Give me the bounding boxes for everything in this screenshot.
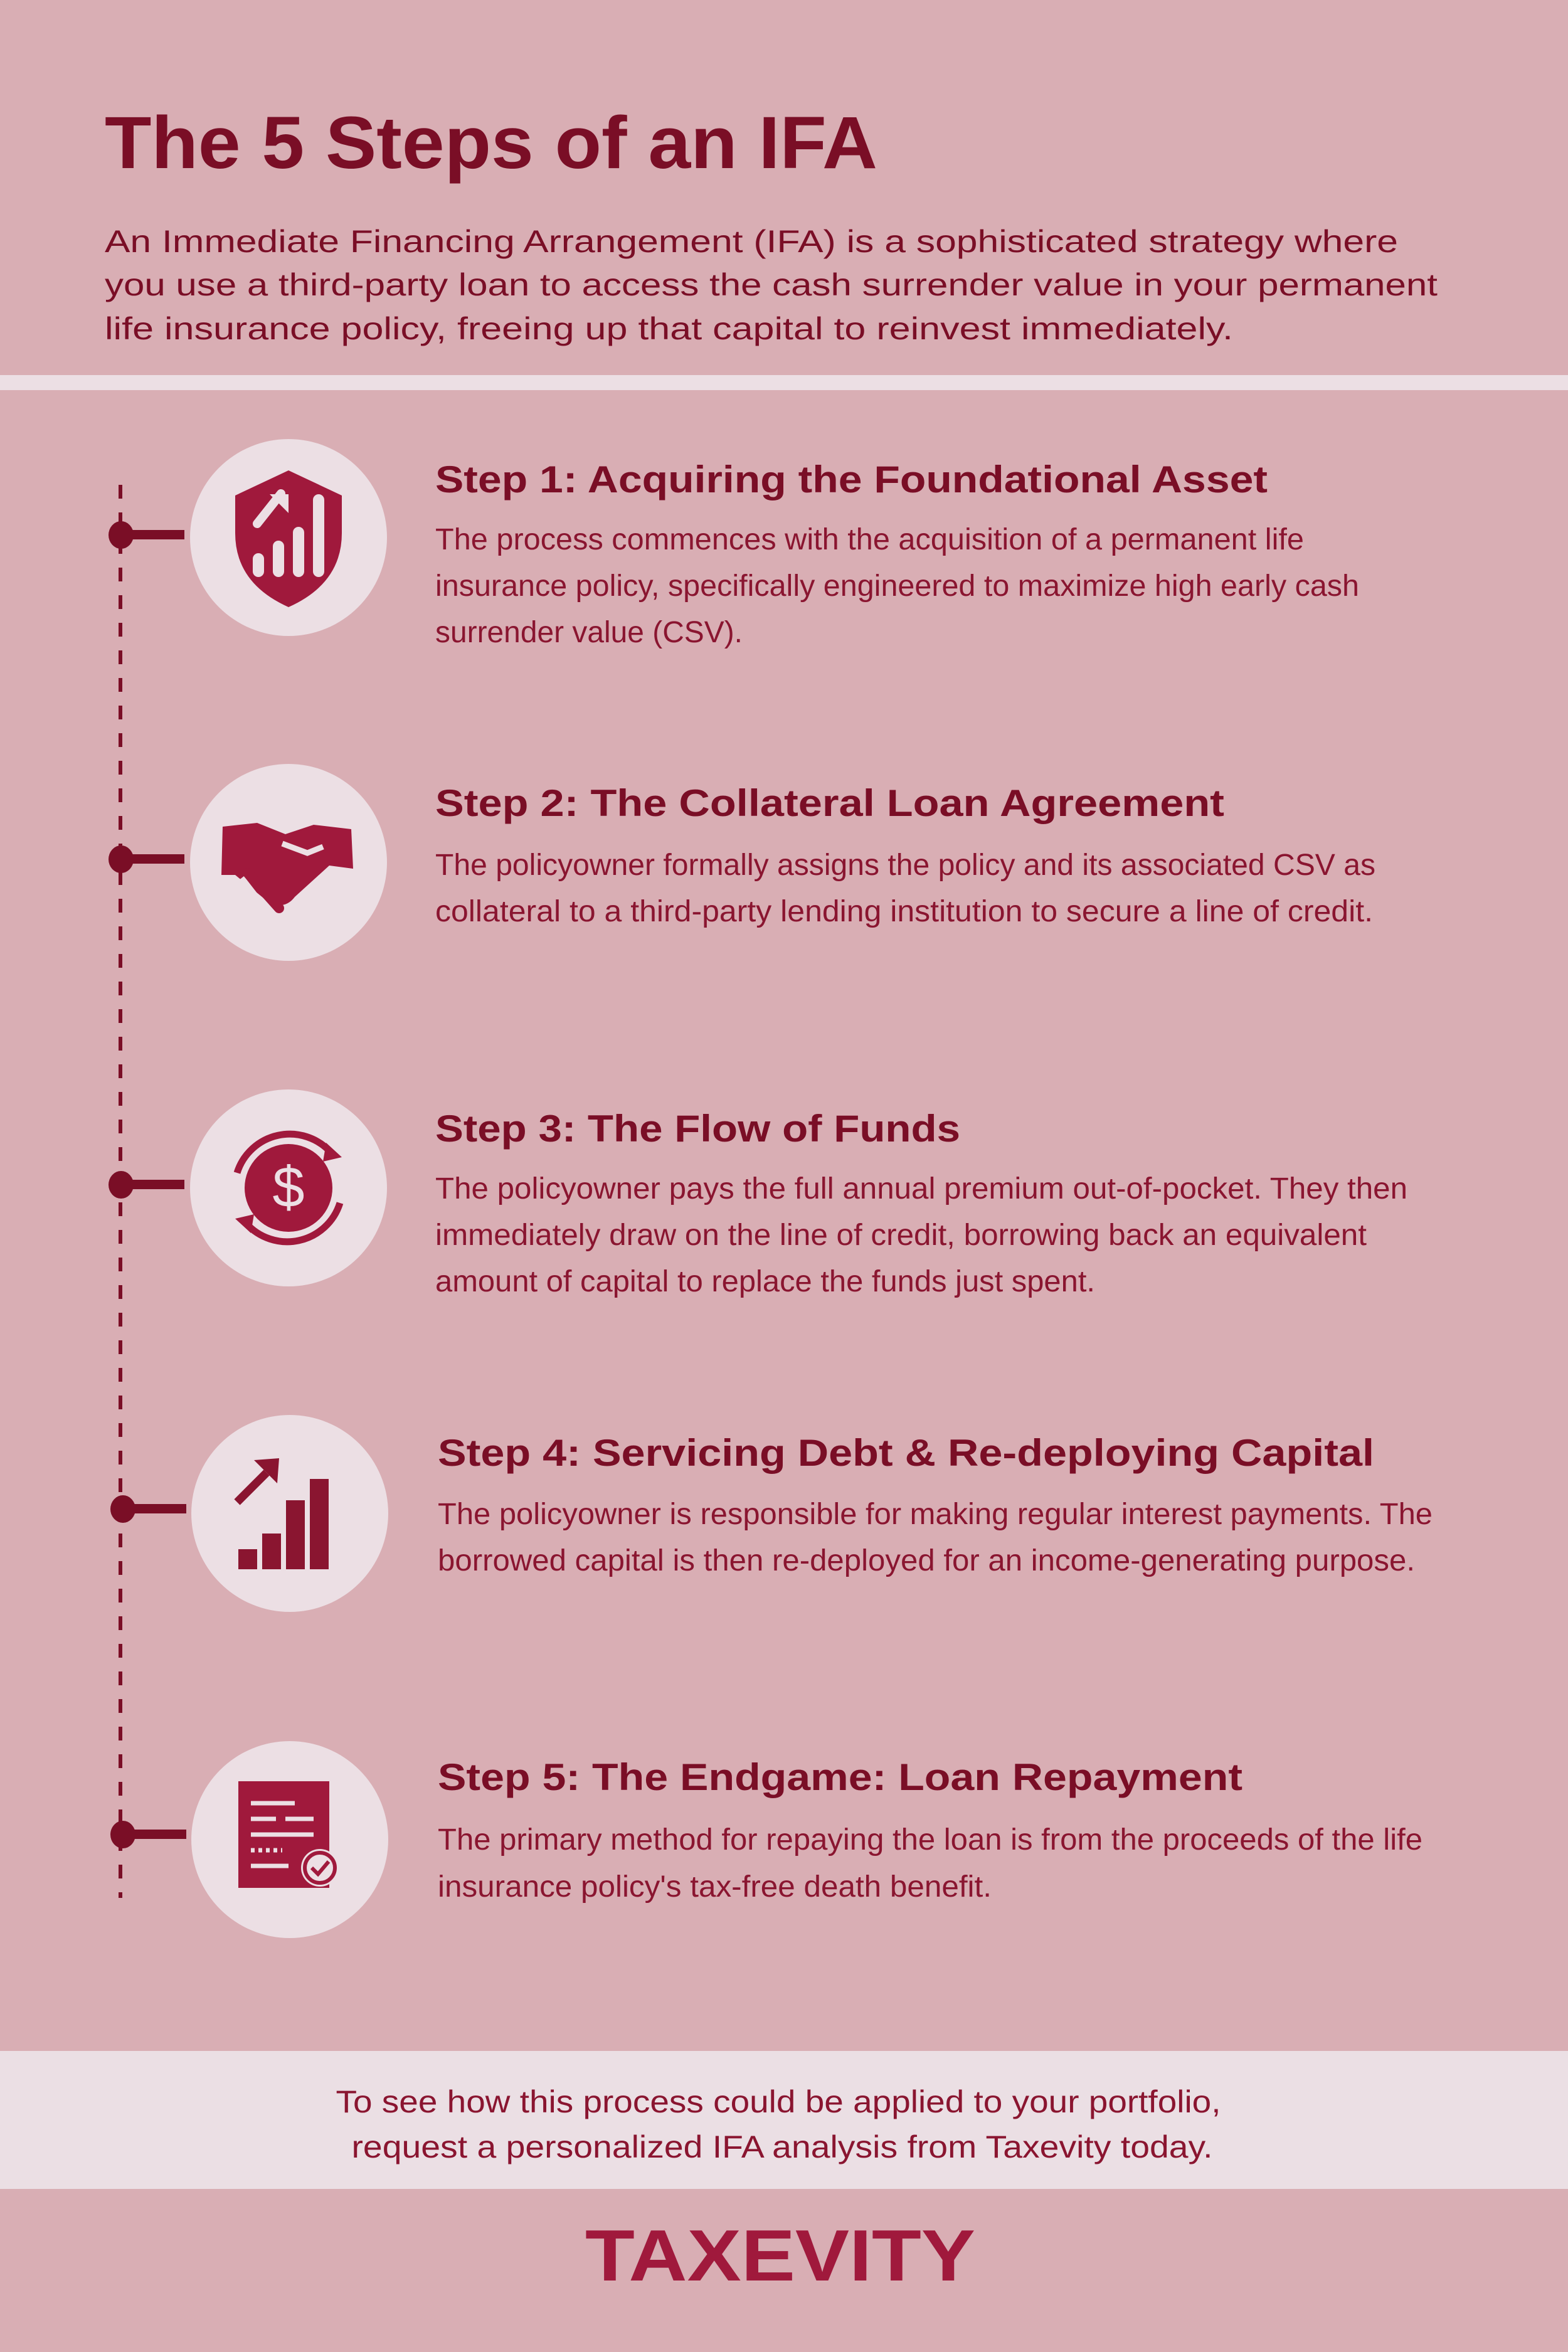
call to action band — [0, 2051, 1568, 2189]
title: The 5 Steps of an IFA — [105, 102, 877, 184]
intro text: you use a third-party loan to access the cash surrender value in your permanent — [105, 267, 1438, 302]
step 1 — [435, 458, 1359, 649]
step 3: amount of capital to replace the funds just spent. — [435, 1265, 1095, 1298]
intro text: life insurance policy, freeing up that capital to reinvest immediately. — [105, 311, 1233, 346]
call to action band: To see how this process could be applied to your portfolio, — [336, 2084, 1221, 2119]
step 5: insurance policy's tax-free death benefit. — [438, 1870, 992, 1904]
step 2: Step 2: The Collateral Loan Agreement — [435, 782, 1224, 824]
icon: handshake — [190, 764, 387, 961]
step 4: borrowed capital is then re-deployed for an income-generating purpose. — [438, 1544, 1415, 1577]
icon: receipt check — [191, 1741, 388, 1938]
step 5: Step 5: The Endgame: Loan Repayment — [438, 1756, 1242, 1798]
step 3: Step 3: The Flow of Funds — [435, 1108, 960, 1150]
intro text: An Immediate Financing Arrangement (IFA) is a sophisticated strategy where — [105, 224, 1398, 259]
step 2 — [435, 782, 1375, 928]
call to action band: request a personalized IFA analysis from Taxevity today. — [351, 2129, 1213, 2164]
step 1: The process commences with the acquisition of a permanent life — [435, 523, 1304, 556]
logo: TAXEVITY — [585, 2215, 975, 2296]
icon: dollar cycle — [190, 1089, 387, 1286]
step 3: The policyowner pays the full annual premium out-of-pocket. They then — [435, 1172, 1407, 1205]
intro text — [105, 224, 1438, 346]
icon: shield chart — [190, 439, 387, 636]
step 3: immediately draw on the line of credit, borrowing back an equivalent — [435, 1219, 1367, 1252]
step 3 — [435, 1108, 1407, 1298]
step 5: The primary method for repaying the loan is from the proceeds of the life — [438, 1823, 1422, 1857]
step 2: collateral to a third-party lending institution to secure a line of credit. — [435, 895, 1373, 928]
step 1: Step 1: Acquiring the Foundational Asset — [435, 458, 1268, 501]
timeline — [109, 485, 186, 1898]
icon: growth bars — [191, 1415, 388, 1612]
step 2: The policyowner formally assigns the policy and its associated CSV as — [435, 849, 1375, 882]
step 4: Step 4: Servicing Debt & Re-deploying Capital — [438, 1432, 1374, 1474]
step 1: surrender value (CSV). — [435, 616, 743, 649]
icon: dollar cycle: $ — [272, 1155, 305, 1219]
step 4 — [438, 1432, 1433, 1577]
step 4: The policyowner is responsible for making regular interest payments. The — [438, 1498, 1433, 1531]
step 5 — [438, 1756, 1422, 1904]
step 1: insurance policy, specifically engineered to maximize high early cash — [435, 569, 1359, 603]
